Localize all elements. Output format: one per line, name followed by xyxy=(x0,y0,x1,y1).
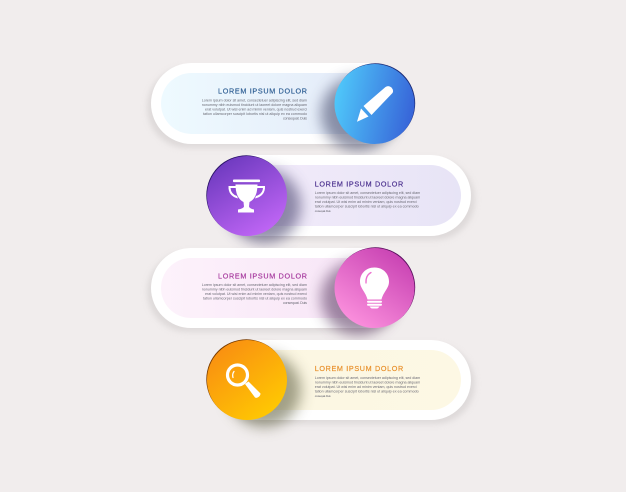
panel: row 3 xyxy=(147,247,415,335)
body text 2: erat volutpat. Ut wisi enim ad minim veniam, quis nostrud exerci xyxy=(315,200,417,204)
circle shadow 3 xyxy=(321,261,395,335)
pill shadow 1 xyxy=(147,67,409,148)
circle shadow 1 xyxy=(321,77,395,151)
title 2: LOREM IPSUM DOLOR xyxy=(315,180,403,188)
circle shadow 2 xyxy=(227,169,301,243)
icon: trophy xyxy=(228,180,265,212)
body text 3: tation ullamcorper suscipit lobortis nisl ut aliquip ex ea commodo xyxy=(203,296,307,300)
body text 1: nonummy nibh euismod tincidunt ut laoreet dolore magna aliquam xyxy=(202,103,307,107)
body text 4: consequat. Duis xyxy=(315,394,331,398)
body text 1: erat volutpat. Ut wisi enim ad minim veniam, quis nostrud exerci xyxy=(205,107,307,111)
white pill 4 xyxy=(208,340,471,420)
body text 3: erat volutpat. Ut wisi enim ad minim veniam, quis nostrud exerci xyxy=(205,292,307,296)
inner panel 4 xyxy=(221,350,461,410)
icon: magnifying glass xyxy=(228,365,260,398)
body text 4 xyxy=(315,376,420,398)
body text 1: Lorem ipsum dolor sit amet, consectetuer adipiscing elit, sed diam xyxy=(202,98,307,102)
body text 2: nonummy nibh euismod tincidunt ut laoreet dolore magna aliquam xyxy=(315,196,420,200)
body text 1 xyxy=(202,98,307,120)
circle rim 1 xyxy=(335,63,415,143)
inner panel 3 xyxy=(161,258,401,318)
body text 2 xyxy=(315,191,420,213)
circle 3 xyxy=(334,248,414,328)
title 3: LOREM IPSUM DOLOR xyxy=(218,271,307,280)
inner panel 1 xyxy=(161,73,401,134)
body text 4: nonummy nibh euismod tincidunt ut laoreet dolore magna aliquam xyxy=(315,380,420,384)
body text 3: consequat. Duis xyxy=(283,301,307,305)
inner panel 2 xyxy=(221,165,461,226)
body text 1: consequat. Duis xyxy=(283,116,307,120)
circle 4 xyxy=(207,340,287,420)
body text 3: nonummy nibh euismod tincidunt ut laoreet dolore magna aliquam xyxy=(202,287,307,291)
pill shadow 4 xyxy=(218,344,475,424)
title 4: LOREM IPSUM DOLOR xyxy=(315,364,403,373)
circle rim 4 xyxy=(206,339,286,419)
panel: row 4 xyxy=(206,339,475,427)
icon: light bulb xyxy=(360,268,389,308)
circle rim 2 xyxy=(206,155,286,235)
circle 2 xyxy=(207,156,287,236)
circle rim 3 xyxy=(335,247,415,327)
body text 4: erat volutpat. Ut wisi enim ad minim veniam, quis nostrud exerci xyxy=(315,385,417,389)
icon: pencil xyxy=(357,86,393,122)
panel: row 1 xyxy=(147,63,415,151)
body text 2: consequat. Duis xyxy=(315,209,331,213)
body text 4: Lorem ipsum dolor sit amet, consectetuer adipiscing elit, sed diam xyxy=(315,376,420,380)
body text 4: tation ullamcorper suscipit lobortis nisl ut aliquip ex ea commodo xyxy=(315,390,419,394)
body text 3 xyxy=(202,283,307,305)
body text 3: Lorem ipsum dolor sit amet, consectetuer adipiscing elit, sed diam xyxy=(202,283,307,287)
title 1: LOREM IPSUM DOLOR xyxy=(218,87,307,96)
circle 1 xyxy=(334,64,414,144)
circle shadow 4 xyxy=(227,353,301,427)
white pill 2 xyxy=(208,155,471,236)
body text 2: Lorem ipsum dolor sit amet, consectetuer adipiscing elit, sed diam xyxy=(315,191,420,195)
pill shadow 3 xyxy=(147,252,409,332)
body text 2: tation ullamcorper suscipit lobortis nisl ut aliquip ex ea commodo xyxy=(315,204,419,208)
body text 1: tation ullamcorper suscipit lobortis nisl ut aliquip ex ea commodo xyxy=(203,112,307,116)
white pill 1 xyxy=(151,63,414,144)
white pill 3 xyxy=(151,248,414,328)
pill shadow 2 xyxy=(218,159,475,240)
panel: row 2 xyxy=(206,155,475,243)
